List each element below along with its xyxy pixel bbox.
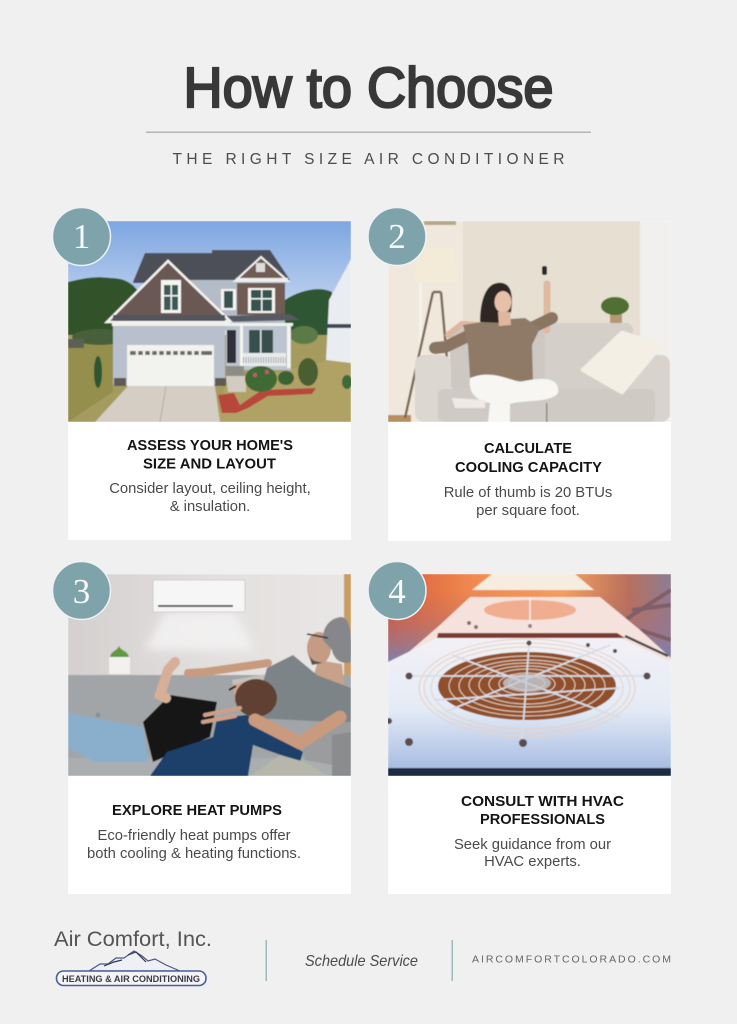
woman's raised arm [160,662,175,698]
wall unit [153,580,245,612]
footer logo: Air Comfort, Inc. [54,928,212,986]
title: How to Choose [184,56,554,120]
potted plant [109,657,130,674]
white trousers [470,375,558,422]
man's neck and head [314,660,344,686]
body text: Consider layout, ceiling height, [109,481,311,497]
plant [610,314,622,323]
heading: SIZE AND LAYOUT [143,456,276,472]
sofa [545,323,633,389]
mulch and shrubs [218,388,316,413]
badge: number 2 [368,208,426,266]
body text: both cooling & heating functions. [87,846,301,862]
panel: step 2 [368,208,671,541]
badge: number 1: 1 [73,217,90,256]
garage wall [113,325,225,385]
body text: Eco-friendly heat pumps offer [97,828,291,844]
panel: step 3 [52,562,351,894]
badge: number 3 [52,562,110,620]
subtitle: THE RIGHT SIZE AIR CONDITIONER [172,151,564,168]
body text: & insulation. [170,499,250,515]
photo: woman on sofa with remote [388,221,671,422]
icon: mountain range [89,951,180,971]
heading [461,793,624,828]
woman's head [232,682,245,712]
panel: step 4 [368,562,671,894]
heading [455,440,602,476]
main gable [107,261,230,322]
man's arm on sofa [188,663,268,673]
body text: Rule of thumb is 20 BTUs [444,485,612,501]
bolts [386,640,650,747]
heading: CALCULATE [484,440,572,457]
heading [127,437,293,472]
footer logo: Air Comfort, Inc.: Air Comfort, Inc. [54,928,212,951]
heading: ASSESS YOUR HOME'S [127,437,293,454]
footer logo: Air Comfort, Inc.: HEATING & AIR CONDITIONING [62,974,200,984]
man's shirt [253,655,351,722]
footer: website: AIRCOMFORTCOLORADO.COM [472,954,671,966]
panel: step 1 [52,208,352,540]
roof [133,250,290,283]
heading: PROFESSIONALS [480,811,605,828]
badge: number 2: 2 [388,217,406,256]
porch roof [224,314,299,322]
photo: suburban house [68,221,352,422]
badge: number 4: 4 [388,572,406,611]
footer: schedule service: Schedule Service [305,953,418,970]
pillow [232,674,265,685]
blanket [250,755,328,776]
cool air [145,612,255,650]
photo: rooftop condenser fan [386,574,671,776]
upper storey [190,279,286,330]
porch [226,325,291,370]
badge: number 3: 3 [73,572,90,611]
driveway [95,386,220,422]
heading: COOLING CAPACITY [455,459,602,476]
body text [109,481,311,515]
heading: EXPLORE HEAT PUMPS [112,802,282,819]
man's dark jeans [150,715,303,776]
man's forearm [255,717,340,743]
body text: HVAC experts. [484,854,581,870]
pillow [582,332,662,393]
woman's black shirt [143,695,217,762]
body text: Seek guidance from our [454,837,611,853]
body text [454,837,611,870]
body text [444,485,612,519]
walkway [226,376,246,392]
badge: number 1 [52,208,110,266]
photo: couple relaxing under air conditioner [68,574,351,776]
lamp [413,247,458,283]
fan [438,652,616,720]
body text: per square foot. [476,503,580,519]
sofa [68,674,351,758]
badge: number 4 [368,562,426,620]
heading: CONSULT WITH HVAC [461,793,624,810]
woman's light jeans [68,713,148,762]
hair and face [480,283,512,323]
body text [87,828,301,862]
garage door [127,345,214,386]
neighbour house [326,259,351,363]
arms and shirt [435,336,468,348]
